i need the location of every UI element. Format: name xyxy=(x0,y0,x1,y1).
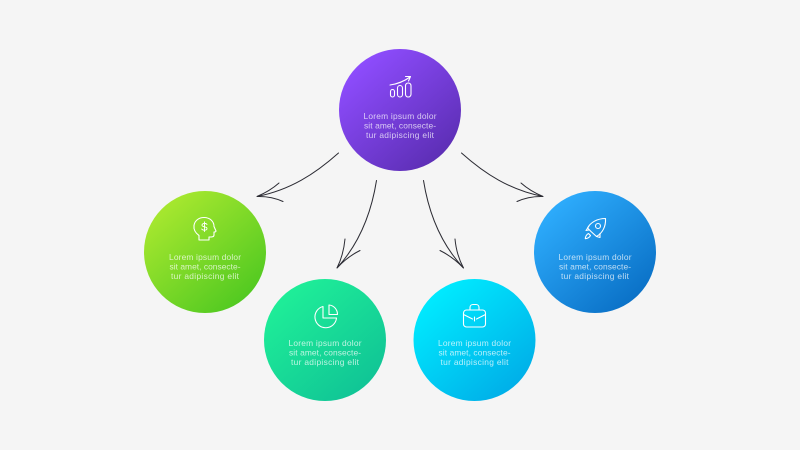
icon: briefcase xyxy=(464,304,486,327)
text: blue circle description: Lorem ipsum dolor xyxy=(558,252,632,262)
text: green circle description: Lorem ipsum dolor xyxy=(169,252,241,262)
text: top circle description: sit amet, consecte- xyxy=(364,120,436,130)
text: top circle description xyxy=(364,111,437,140)
panel: green circle xyxy=(144,191,266,313)
panel: blue circle xyxy=(534,191,656,313)
text: blue circle description: sit amet, consecte- xyxy=(559,262,631,272)
text: cyan circle description xyxy=(438,338,511,367)
text: green circle description xyxy=(169,252,241,281)
icon: growth chart xyxy=(390,76,411,97)
text: cyan circle description: tur adipiscing elit xyxy=(440,357,509,367)
text: teal circle description: sit amet, consecte- xyxy=(289,348,361,358)
arrow: top to cyan xyxy=(424,180,464,268)
text: top circle description: Lorem ipsum dolor xyxy=(364,111,437,121)
text: cyan circle description: Lorem ipsum dolor xyxy=(438,338,511,348)
text: teal circle description: Lorem ipsum dolor xyxy=(288,338,362,348)
text: cyan circle description: sit amet, consecte- xyxy=(438,348,511,358)
icon: rocket xyxy=(585,218,606,239)
text: blue circle description xyxy=(558,252,632,281)
panel: top purple circle xyxy=(339,49,461,171)
icon: head with dollar xyxy=(194,218,216,240)
text: green circle description: sit amet, consecte- xyxy=(170,262,241,272)
panel: teal circle xyxy=(264,279,386,401)
arrow: top to blue xyxy=(462,153,543,202)
text: teal circle description xyxy=(288,338,362,367)
text: top circle description: tur adipiscing elit xyxy=(366,130,435,140)
text: green circle description: tur adipiscing elit xyxy=(171,271,240,281)
text: blue circle description: tur adipiscing elit xyxy=(561,271,630,281)
arrow: top to green xyxy=(257,153,338,202)
icon: pie chart xyxy=(315,305,338,328)
text: teal circle description: tur adipiscing elit xyxy=(291,357,360,367)
arrow: top to teal xyxy=(337,180,376,268)
panel: cyan circle xyxy=(414,279,536,401)
